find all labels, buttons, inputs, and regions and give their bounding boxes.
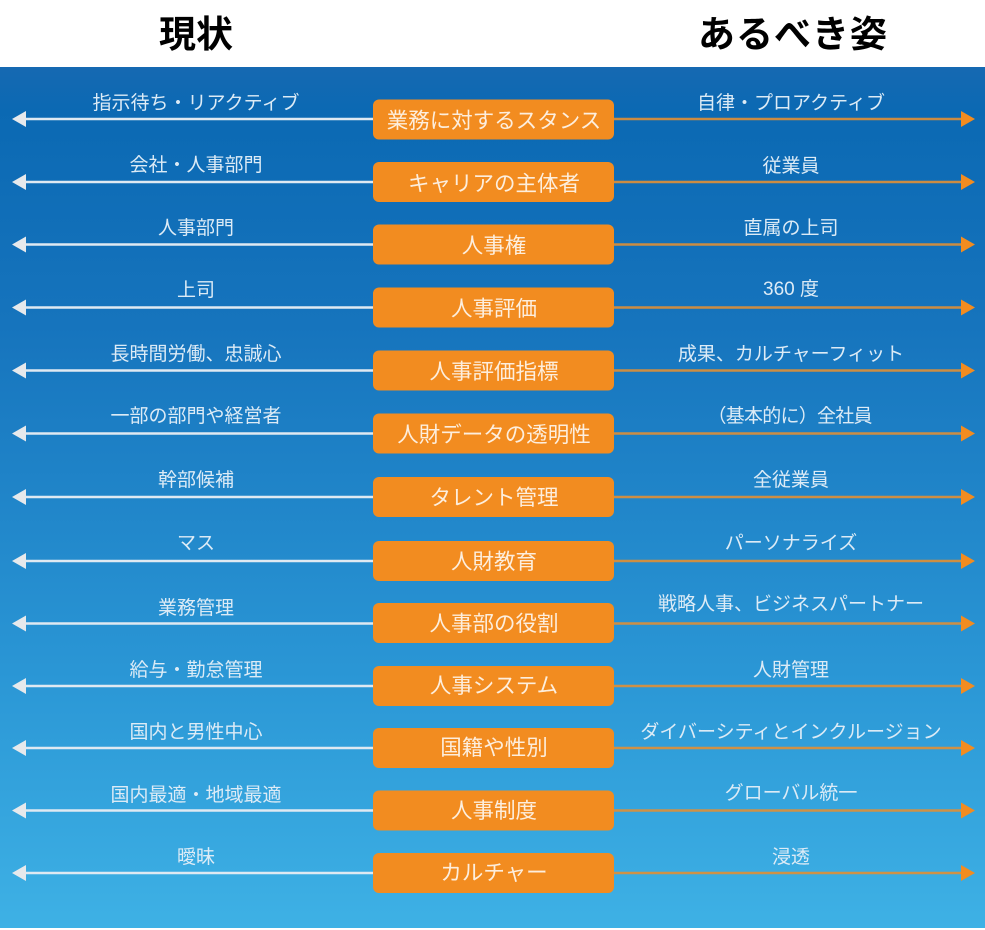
row: 人事システム: 給与・勤怠管理 (129, 659, 263, 681)
row: 国籍や性別: 国内と男性中心 (129, 721, 263, 743)
row: 人事部の役割: 業務管理 (158, 597, 234, 619)
row: 人事評価指標 (12, 343, 975, 390)
row: 人事権: 人事部門 (158, 217, 234, 239)
row: 人事評価 (12, 278, 975, 328)
row: 人事評価指標: 長時間労働、忠誠心 (110, 343, 282, 365)
row: 人財データの透明性 (12, 405, 975, 454)
row: キャリアの主体者: 会社・人事部門 (129, 154, 263, 176)
heading: ideal state: あるべき姿 (698, 14, 888, 55)
row: 人事権 (12, 217, 975, 264)
row: 人事制度: グローバル統一 (725, 782, 857, 804)
row: 業務に対するスタンス (12, 91, 975, 140)
row: 国籍や性別 (12, 721, 975, 768)
row: 人財教育: パーソナライズ (725, 532, 857, 554)
row: 人事評価指標: 人事評価指標 (429, 360, 559, 384)
row: 人事権: 直属の上司 (743, 217, 839, 239)
row: タレント管理: 幹部候補 (158, 469, 234, 491)
row: タレント管理: 全従業員 (753, 469, 829, 491)
row: 人事評価: 360 度 (763, 278, 819, 300)
row: 人事制度: 人事制度 (451, 799, 537, 823)
row: キャリアの主体者: 従業員 (762, 155, 820, 177)
row: 人事システム: 人財管理 (753, 659, 829, 681)
row: 業務に対するスタンス: 指示待ち・リアクティブ (93, 91, 299, 114)
row: タレント管理: タレント管理 (429, 486, 559, 510)
row: カルチャー: カルチャー (440, 861, 548, 885)
row: 人財教育 (12, 532, 975, 581)
row: カルチャー: 浸透 (772, 846, 810, 868)
row: 人財データの透明性: 一部の部門や経営者 (110, 405, 282, 427)
row: 人財教育: 人財教育 (451, 550, 537, 574)
row: タレント管理 (12, 469, 975, 517)
row: 業務に対するスタンス: 自律・プロアクティブ (697, 91, 885, 114)
row: 国籍や性別: 国籍や性別 (440, 736, 548, 760)
row: 人事評価: 上司 (177, 279, 215, 301)
heading: current state: 現状 (159, 14, 233, 55)
row: 人事部の役割 (12, 593, 975, 643)
row: 人事権: 人事権 (462, 234, 526, 258)
row: 人事システム (12, 659, 975, 706)
row: カルチャー: 曖昧 (177, 846, 215, 868)
row: 人事システム: 人事システム (430, 674, 558, 698)
row: 人財教育: マス (177, 533, 215, 554)
row: カルチャー (12, 846, 975, 893)
row: 業務に対するスタンス: 業務に対するスタンス (387, 109, 601, 133)
row: 人財データの透明性: 人財データの透明性 (397, 423, 591, 447)
row: キャリアの主体者: キャリアの主体者 (408, 172, 580, 196)
row: キャリアの主体者 (12, 154, 975, 202)
row: 国籍や性別: ダイバーシティとインクルージョン (640, 721, 942, 743)
row: 人事部の役割: 人事部の役割 (429, 612, 559, 636)
row: 人事制度 (12, 782, 975, 830)
row: 人事制度: 国内最適・地域最適 (110, 784, 282, 806)
row: 人財データの透明性: （基本的に）全社員 (708, 405, 872, 427)
row: 人事部の役割: 戦略人事、ビジネスパートナー (658, 593, 924, 615)
row: 人事評価指標: 成果、カルチャーフィット (678, 343, 904, 365)
row: 人事評価: 人事評価 (451, 297, 537, 321)
